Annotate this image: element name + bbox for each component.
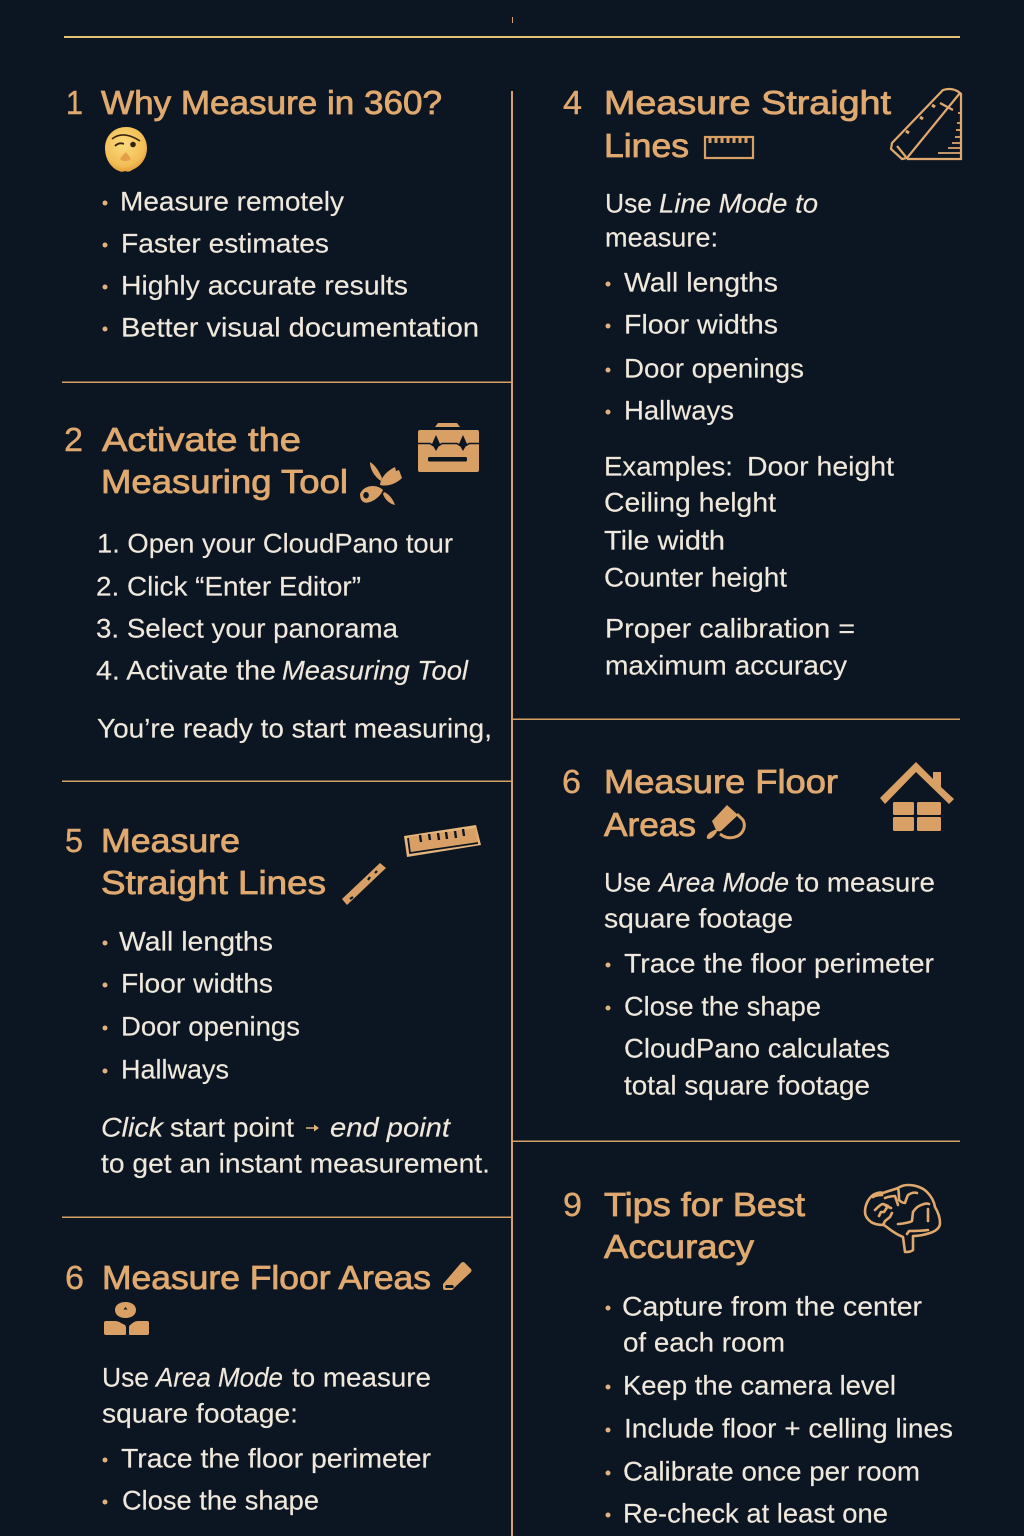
heading: measure floor areas: 6 [65, 1259, 84, 1296]
list: line measurements: Floor widths [624, 310, 778, 340]
heading: tips for best accuracy: Accuracy [604, 1228, 755, 1265]
text: area mode intro [102, 1363, 431, 1429]
icon: pencil [443, 1262, 472, 1290]
list: benefits: Faster estimates [121, 229, 329, 259]
list: tips [606, 1292, 953, 1529]
list: area steps [102, 1444, 431, 1516]
heading: why measure in 360: Why Measure in 360? [101, 84, 442, 121]
text: line mode intro: measure: [605, 223, 718, 253]
heading: activate the measuring tool: 2 [64, 421, 83, 458]
list: area steps: Close the shape [624, 992, 821, 1022]
list: measurement types: Hallways [121, 1055, 229, 1085]
list: steps: 1. Open your CloudPano tour [97, 529, 453, 559]
heading: measure floor areas [562, 763, 838, 843]
text: click instruction [101, 1113, 490, 1179]
list: steps [96, 529, 469, 686]
list: steps: 4. Activate the [96, 656, 276, 686]
heading: tips for best accuracy: 9 [563, 1186, 582, 1223]
icon: tools [360, 462, 402, 505]
list: benefits: Measure remotely [120, 187, 345, 217]
heading: tips for best accuracy: Tips for Best [604, 1186, 805, 1223]
panel: section 1 why measure in 360 [66, 84, 479, 343]
list: tips: Keep the camera level [623, 1371, 896, 1401]
panel: section 9 tips for best accuracy [563, 1185, 953, 1529]
text: examples: Examples: [604, 452, 733, 482]
panel: section 6 measure floor areas left [65, 1259, 472, 1516]
list: line measurements [606, 268, 804, 426]
list: area steps: Close the shape [122, 1486, 319, 1516]
list: area steps: Trace the floor perimeter [624, 949, 934, 979]
icon: house [880, 762, 954, 831]
text: examples: Counter height [604, 563, 788, 593]
heading: measure straight lines [65, 822, 326, 901]
list: line measurements: Wall lengths [624, 268, 778, 298]
text: area mode intro: square footage: [102, 1399, 298, 1429]
text: calibration note [605, 614, 855, 681]
text: area mode intro: Area Mode [657, 868, 789, 898]
text: examples [604, 452, 895, 593]
heading: activate the measuring tool: Activate the [102, 421, 301, 458]
text: line mode intro [605, 189, 818, 253]
icon: small ruler [342, 863, 386, 905]
list: steps: Measuring Tool [282, 656, 469, 686]
text: line mode intro: Line Mode to [659, 189, 818, 219]
text: line mode intro: Use [605, 189, 652, 219]
heading: measure straight lines: Measure Straight [604, 84, 891, 121]
list: benefits: Better visual documentation [121, 313, 479, 343]
text: examples: Ceiling helght [604, 488, 777, 518]
list: area steps: total square footage [624, 1071, 870, 1101]
heading: measure straight lines: Lines [604, 127, 689, 164]
text: ready to start: You’re ready to start measuring, [97, 714, 492, 744]
list: steps: 2. Click “Enter Editor” [96, 572, 361, 602]
text: area mode intro: to measure [292, 1363, 431, 1393]
text: area mode intro: square footage [604, 904, 793, 934]
icon: area blocks [104, 1302, 149, 1335]
panel: section 5 measure straight lines [65, 822, 490, 1179]
list: measurement types: Door openings [121, 1012, 300, 1042]
heading: measure straight lines: 5 [65, 822, 83, 859]
text: click instruction: start point [170, 1113, 295, 1143]
list: line measurements: Hallways [624, 396, 734, 426]
text: area mode intro: Use [604, 868, 651, 898]
list: area steps: CloudPano calculates [624, 1034, 890, 1064]
heading: measure floor areas: Measure Floor [604, 763, 838, 800]
text: area mode intro: Use [102, 1363, 149, 1393]
heading: measure straight lines: Measure [101, 822, 240, 859]
panel: section 4 measure straight lines right [563, 84, 961, 681]
text: area mode intro [604, 868, 935, 934]
heading: measure floor areas: Areas [604, 806, 696, 843]
heading: tips for best accuracy [563, 1186, 805, 1265]
heading: why measure in 360: 1 [66, 84, 83, 121]
text: calibration note: maximum accuracy [605, 651, 848, 681]
icon: toolbox [418, 423, 480, 472]
heading: activate the measuring tool [64, 421, 348, 500]
list: steps: 3. Select your panorama [96, 614, 399, 644]
icon: brain [865, 1185, 940, 1252]
icon: paint bucket [707, 805, 744, 839]
icon: thinking face emoji [105, 127, 147, 172]
text: area mode intro: to measure [796, 868, 935, 898]
list: measurement types [102, 927, 300, 1085]
text: click instruction: to get an instant measurement. [101, 1149, 490, 1179]
heading: measure floor areas: Measure Floor Areas [102, 1259, 431, 1296]
list: area steps [606, 949, 934, 1101]
text: click instruction: Click [101, 1113, 165, 1143]
list: benefits [102, 187, 479, 343]
list: tips: Re-check at least one [623, 1499, 888, 1529]
heading: measure straight lines: 4 [563, 84, 582, 121]
icon: set square and ruler [891, 89, 961, 159]
heading: measure straight lines: Straight Lines [101, 864, 326, 901]
text: examples: Door height [747, 452, 895, 482]
heading: measure straight lines [563, 84, 891, 164]
list: benefits: Highly accurate results [121, 271, 408, 301]
icon: ruler [404, 825, 481, 857]
heading: activate the measuring tool: Measuring Tool [101, 463, 348, 500]
list: measurement types: Floor widths [121, 969, 273, 999]
list: tips: Calibrate once per room [623, 1457, 920, 1487]
icon: outlined ruler [705, 137, 753, 158]
panel: section 6 measure floor areas right [562, 762, 954, 1101]
text: calibration note: Proper calibration = [605, 614, 855, 644]
list: line measurements: Door openings [624, 354, 804, 384]
list: area steps: Trace the floor perimeter [121, 1444, 431, 1474]
list: tips: Include floor + celling lines [624, 1414, 953, 1444]
text: area mode intro: Area Mode [154, 1363, 283, 1393]
panel: section 2 activate the measuring tool [64, 421, 492, 744]
text: examples: Tile width [604, 526, 725, 556]
heading: measure floor areas: 6 [562, 763, 581, 800]
list: tips: Capture from the center [622, 1292, 922, 1322]
list: tips: of each room [623, 1328, 785, 1358]
text: click instruction: end point [330, 1113, 452, 1143]
list: measurement types: Wall lengths [119, 927, 273, 957]
